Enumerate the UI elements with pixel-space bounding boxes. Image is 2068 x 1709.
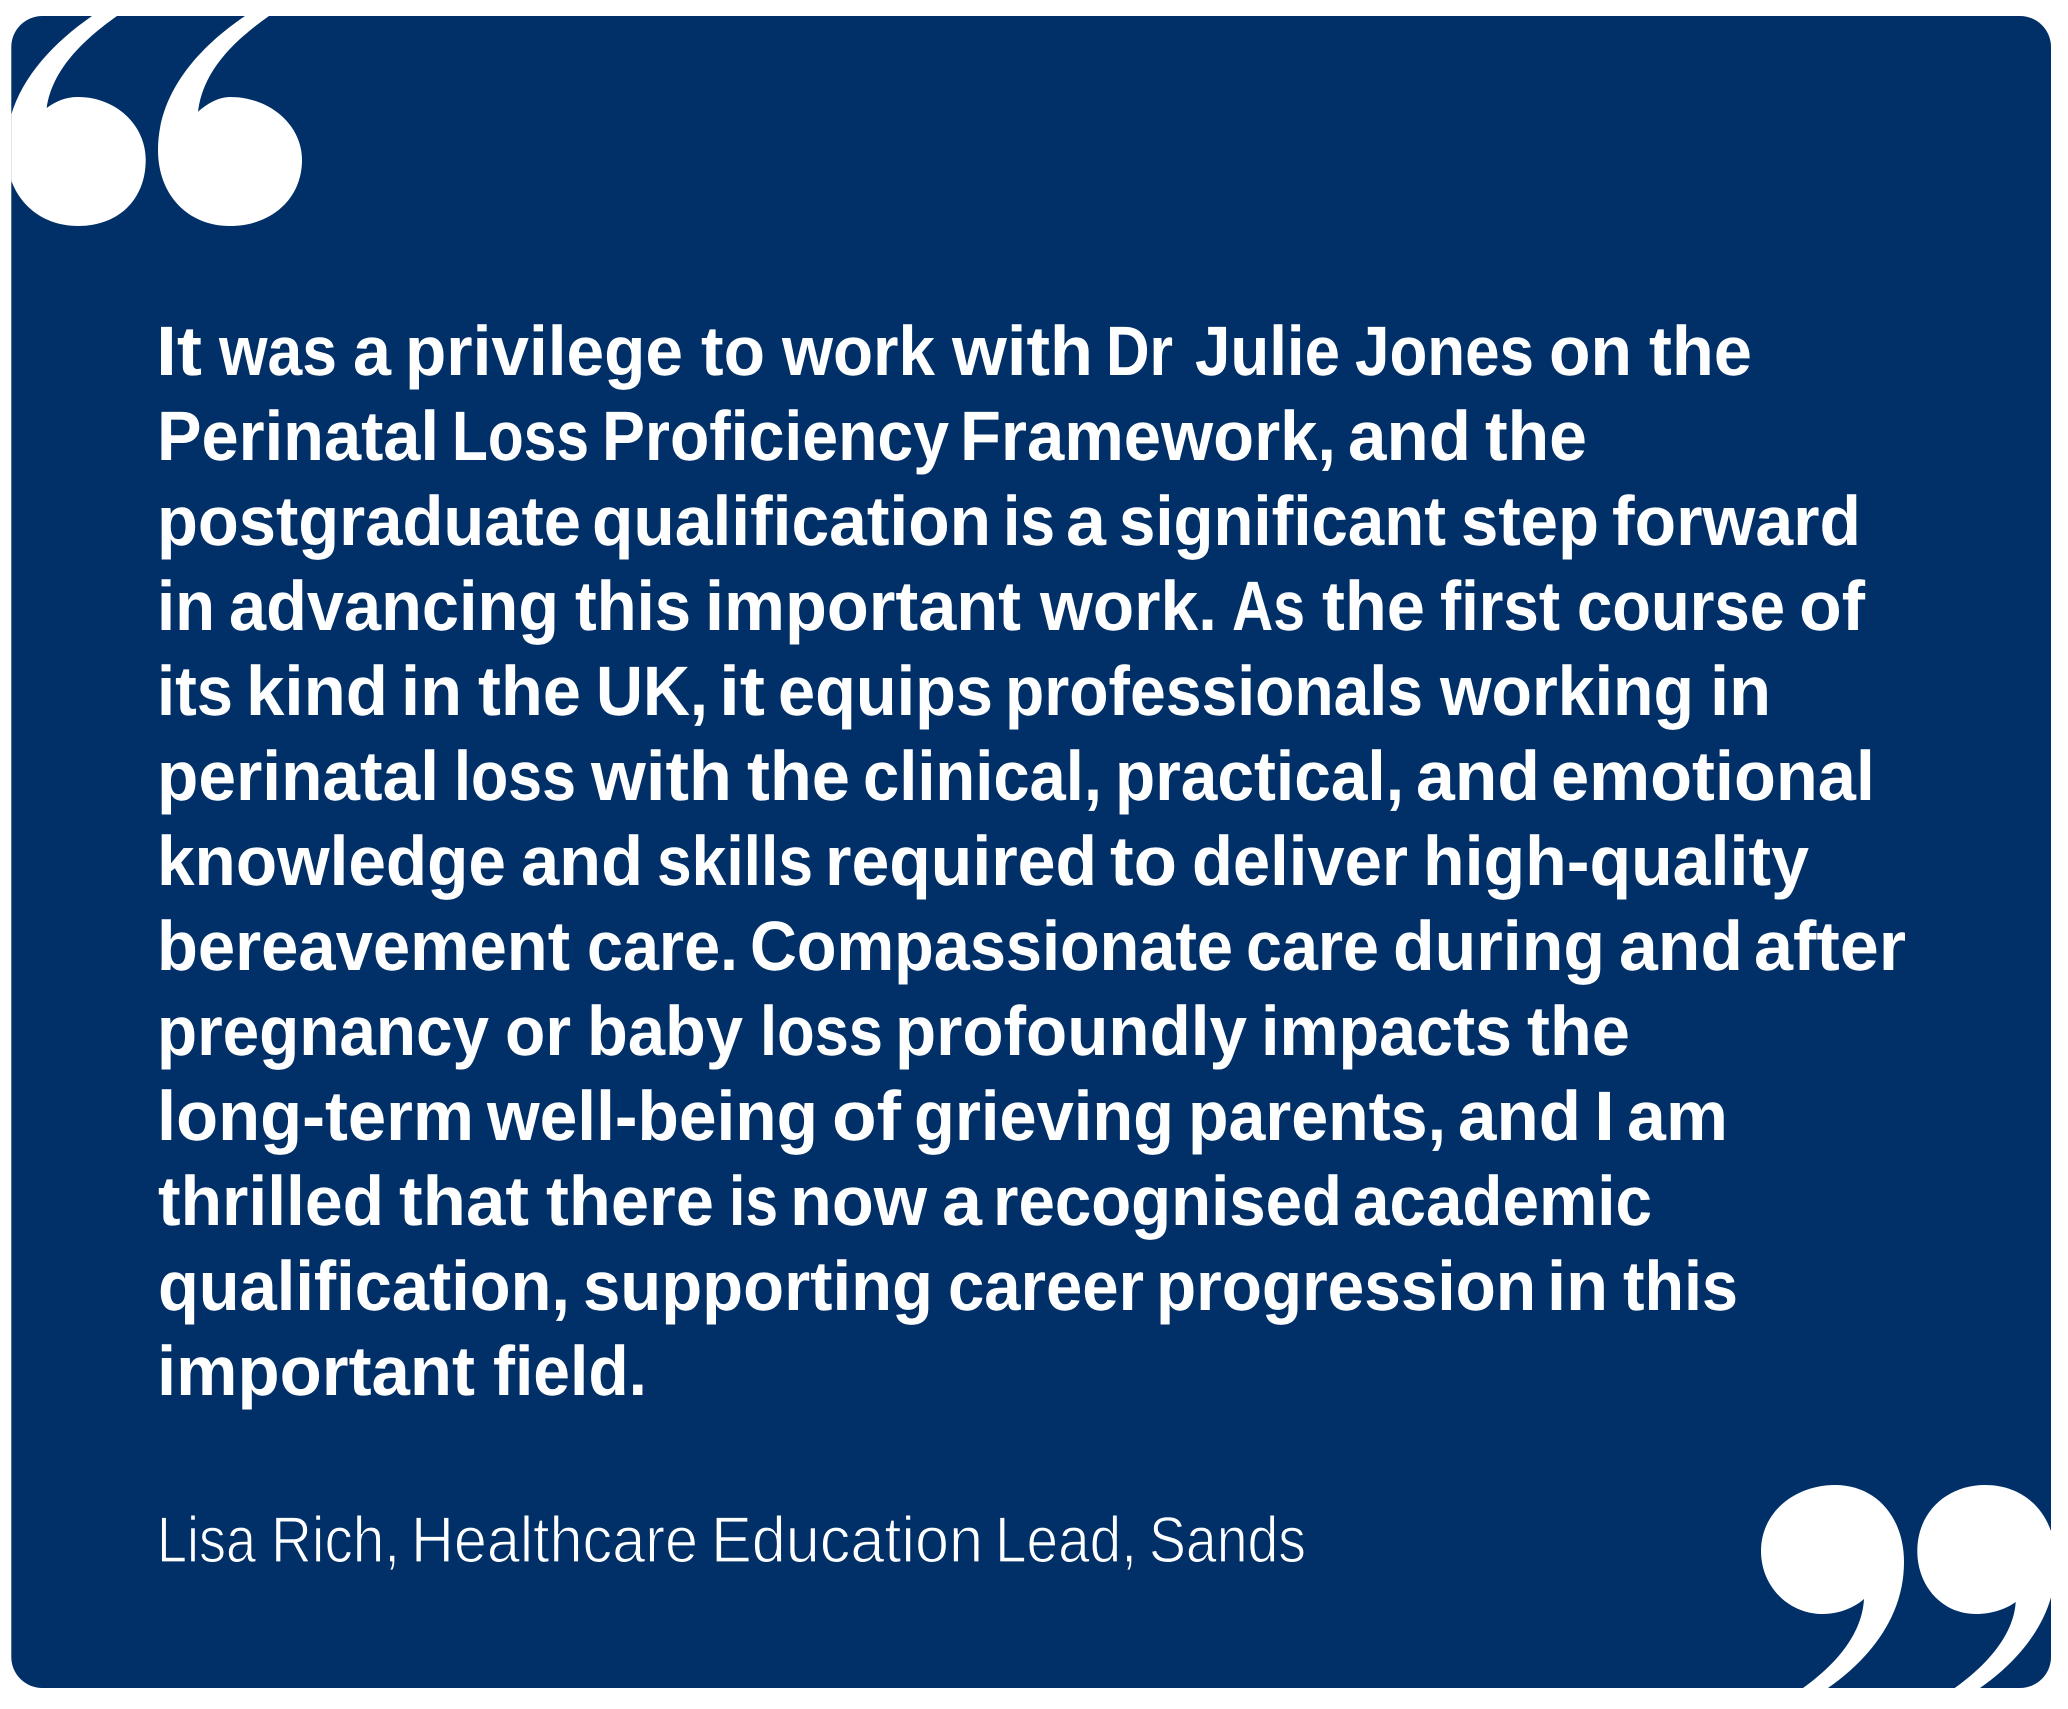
text block: testimonial quote: clinical,: [863, 737, 1102, 815]
text block: testimonial quote: Loss: [452, 397, 589, 475]
text block: testimonial quote: first: [1440, 567, 1560, 645]
text block: testimonial quote: is: [729, 1162, 778, 1240]
text block: testimonial quote: the: [1322, 567, 1425, 645]
text block: testimonial quote: profoundly: [895, 992, 1247, 1070]
text block: testimonial quote: important: [705, 567, 1021, 645]
text block: testimonial quote: pregnancy: [157, 992, 489, 1070]
text block: testimonial quote: high-quality: [1423, 822, 1809, 900]
text block: testimonial quote: progression: [1156, 1247, 1536, 1325]
text block: attribution: Rich,: [271, 1503, 400, 1576]
text block: testimonial quote: postgraduate: [157, 482, 581, 560]
text block: testimonial quote: thrilled: [158, 1162, 384, 1240]
text block: testimonial quote: supporting: [583, 1247, 933, 1325]
text block: testimonial quote: grieving: [914, 1077, 1174, 1155]
text block: testimonial quote: practical,: [1115, 737, 1404, 815]
text block: testimonial quote: a: [353, 312, 392, 390]
text block: testimonial quote: Perinatal: [157, 397, 439, 475]
text block: testimonial quote: impacts: [1261, 992, 1512, 1070]
text block: testimonial quote: As: [1232, 567, 1305, 645]
text block: testimonial quote: its: [157, 652, 233, 730]
text block: testimonial quote: loss: [760, 992, 883, 1070]
text block: testimonial quote: emotional: [1551, 737, 1875, 815]
text block: testimonial quote: Jones: [1355, 312, 1534, 390]
text block: attribution: [157, 1503, 1306, 1576]
text block: testimonial quote: qualification: [592, 482, 991, 560]
text block: testimonial quote: of: [1799, 567, 1866, 645]
text block: testimonial quote: care: [1246, 907, 1379, 985]
text block: testimonial quote: with: [590, 737, 732, 815]
text block: testimonial quote: and: [1416, 737, 1540, 815]
text block: testimonial quote: advancing: [229, 567, 559, 645]
text block: testimonial quote: Dr: [1106, 312, 1173, 390]
text block: testimonial quote: and: [1348, 397, 1471, 475]
text block: testimonial quote: course: [1577, 567, 1785, 645]
text block: testimonial quote: am: [1627, 1077, 1728, 1155]
text block: testimonial quote: kind: [246, 652, 388, 730]
text block: testimonial quote: this: [1623, 1247, 1738, 1325]
text block: testimonial quote: to: [1110, 822, 1177, 900]
text block: testimonial quote: work.: [1039, 567, 1217, 645]
text block: testimonial quote: I: [1594, 1077, 1615, 1155]
text block: testimonial quote: UK,: [596, 652, 708, 730]
text block: testimonial quote: parents,: [1188, 1077, 1446, 1155]
text block: testimonial quote: in: [157, 567, 215, 645]
text block: testimonial quote: baby: [587, 992, 743, 1070]
text block: testimonial quote: important: [157, 1332, 475, 1410]
text block: testimonial quote: Framework,: [960, 397, 1336, 475]
text block: testimonial quote: to: [701, 312, 765, 390]
text block: testimonial quote: Julie: [1195, 312, 1340, 390]
icon: closing quotation mark: [1761, 1485, 2056, 1688]
text block: testimonial quote: qualification,: [158, 1247, 570, 1325]
text block: testimonial quote: Proficiency: [602, 397, 949, 475]
text block: testimonial quote: of: [832, 1077, 902, 1155]
text block: testimonial quote: well-being: [486, 1077, 818, 1155]
text block: attribution: Education: [711, 1503, 983, 1576]
text block: testimonial quote: knowledge: [157, 822, 506, 900]
text block: attribution: Healthcare: [411, 1503, 698, 1576]
text block: testimonial quote: recognised: [993, 1162, 1342, 1240]
text block: attribution: Lisa: [157, 1503, 257, 1576]
text block: testimonial quote: loss: [454, 737, 576, 815]
text block: testimonial quote: the: [478, 652, 581, 730]
text block: testimonial quote: the: [1649, 312, 1752, 390]
text block: testimonial quote: in: [401, 652, 462, 730]
text block: testimonial quote: in: [1710, 652, 1771, 730]
text block: testimonial quote: and: [521, 822, 643, 900]
text block: testimonial quote: required: [825, 822, 1097, 900]
icon: opening quotation mark: [6, 16, 302, 226]
text block: testimonial quote: a: [942, 1162, 983, 1240]
text block: testimonial quote: this: [575, 567, 691, 645]
text block: testimonial quote: there: [546, 1162, 714, 1240]
text block: attribution: Sands: [1149, 1503, 1306, 1576]
text block: testimonial quote: career: [948, 1247, 1144, 1325]
text block: testimonial quote: academic: [1353, 1162, 1652, 1240]
text block: testimonial quote: It: [156, 312, 202, 390]
text block: testimonial quote: on: [1549, 312, 1632, 390]
text block: testimonial quote: care.: [587, 907, 738, 985]
text block: testimonial quote: with: [951, 312, 1093, 390]
text block: testimonial quote: is: [1003, 482, 1055, 560]
text block: testimonial quote: equips: [778, 652, 993, 730]
text block: testimonial quote: in: [1547, 1247, 1608, 1325]
text block: testimonial quote: deliver: [1192, 822, 1408, 900]
text block: testimonial quote: during: [1393, 907, 1605, 985]
text block: testimonial quote: or: [505, 992, 571, 1070]
text block: testimonial quote: long-term: [157, 1077, 474, 1155]
text block: testimonial quote: professionals: [1005, 652, 1423, 730]
text block: testimonial quote: that: [399, 1162, 529, 1240]
text block: testimonial quote: working: [1439, 652, 1694, 730]
text block: testimonial quote: now: [790, 1162, 928, 1240]
text block: testimonial quote: it: [719, 652, 765, 730]
text block: testimonial quote: field.: [493, 1332, 647, 1410]
text block: testimonial quote: and: [1619, 907, 1743, 985]
text block: testimonial quote: [156, 312, 1906, 1410]
text block: testimonial quote: work: [781, 312, 935, 390]
text block: testimonial quote: was: [218, 312, 337, 390]
text block: testimonial quote: significant: [1119, 482, 1446, 560]
text block: testimonial quote: and: [1458, 1077, 1581, 1155]
text block: testimonial quote: skills: [657, 822, 813, 900]
text block: testimonial quote: the: [1527, 992, 1630, 1070]
text block: testimonial quote: the: [747, 737, 850, 815]
text block: testimonial quote: bereavement: [157, 907, 570, 985]
text block: testimonial quote: after: [1754, 907, 1906, 985]
text block: testimonial quote: step: [1461, 482, 1599, 560]
text block: testimonial quote: perinatal: [157, 737, 439, 815]
text block: testimonial quote: a: [1066, 482, 1107, 560]
text block: testimonial quote: Compassionate: [750, 907, 1233, 985]
text block: attribution: Lead,: [995, 1503, 1137, 1576]
text block: testimonial quote: privilege: [405, 312, 683, 390]
text block: testimonial quote: the: [1485, 397, 1587, 475]
text block: testimonial quote: forward: [1612, 482, 1861, 560]
